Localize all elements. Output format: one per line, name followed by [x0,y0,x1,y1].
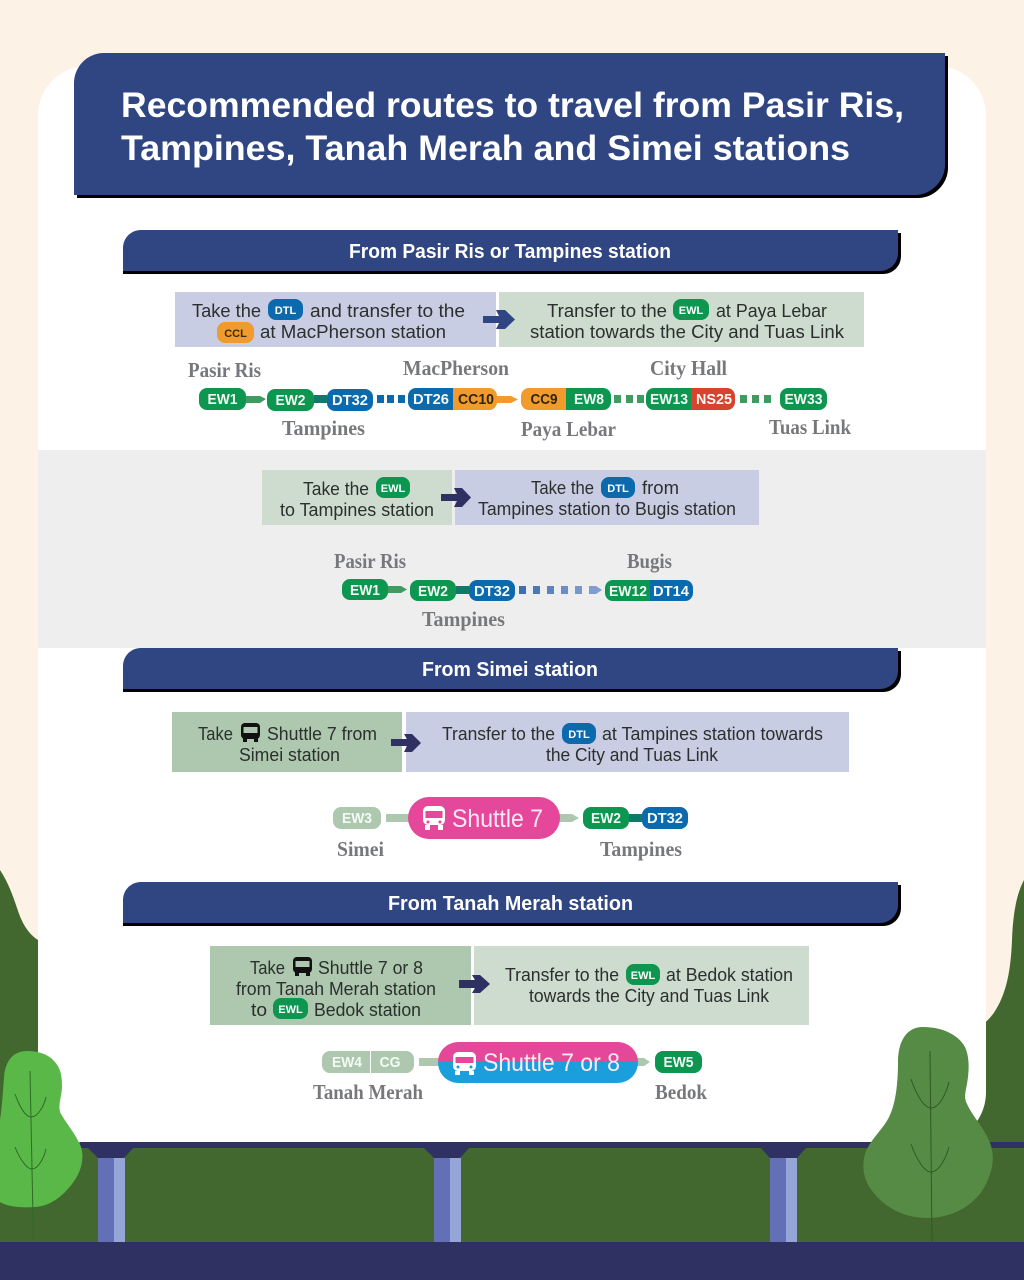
route diagram: Simei shuttle: EW2 [591,811,621,827]
route diagram: Pasir Ris to Tuas Link: EW2 [276,393,306,409]
panel: EWL at Bedok step: EWL [631,970,655,982]
panel: EWL to Tampines step [262,470,452,525]
section heading: Pasir Ris or Tampines: From Pasir Ris or Tampines station [349,241,671,263]
route diagram: Pasir Ris to Tuas Link: EW33 [784,392,822,408]
viaduct pillar 1 [87,1147,134,1242]
icon: bus [293,957,312,976]
panel: EWL to Tampines step: Take the [303,478,369,499]
route diagram: Pasir Ris to Tuas Link: DT32 [332,393,368,409]
route diagram: Pasir Ris to Bugis: DT32 [474,584,510,600]
title: Recommended routes to travel from Pasir Ris, [121,86,904,125]
section heading: Tanah Merah: From Tanah Merah station [388,893,633,915]
ground: green embankment [38,1147,1024,1243]
panel: DTL to Bugis step: Tampines station to Bugis station [478,498,736,519]
section heading: Simei: From Simei station [422,659,598,681]
panel: Shuttle 7 or 8 step: EWL [278,1004,303,1016]
icon: left tree [0,1051,82,1242]
shuttle 7 or 8 pill: Shuttle 7 or 8 [483,1049,620,1077]
section heading: Pasir Ris or Tampines [123,230,901,274]
panel: DTL then CCL step: at MacPherson station [260,321,446,342]
route diagram: Pasir Ris to Bugis: EW12 [609,584,647,600]
panel: DTL then CCL step: CCL [224,328,247,340]
panel: EWL transfer step: Transfer to the [547,300,667,321]
route diagram: Tanah Merah shuttle: EW4 [332,1055,362,1071]
route diagram: Pasir Ris to Tuas Link: Paya Lebar [521,417,616,441]
arrow: step 4 [459,975,490,993]
icon: bus [241,723,260,742]
route diagram: Pasir Ris to Tuas Link: CC10 [458,392,494,408]
icon: right tree [863,1027,993,1242]
route diagram: Pasir Ris to Bugis: Tampines [422,607,505,631]
panel: EWL transfer step: station towards the City and Tuas Link [530,321,845,342]
panel: DTL then CCL step: and transfer to the [310,300,465,321]
route diagram: Pasir Ris to Tuas Link: EW1 [208,392,238,408]
route diagram: Simei shuttle: Tampines [600,837,682,861]
station names: Pasir Ris [188,358,261,382]
panel: DTL to Bugis step: DTL [607,483,629,495]
route diagram: Tanah Merah shuttle [313,1042,707,1104]
route diagram: Tanah Merah shuttle: Bedok [655,1080,707,1104]
route diagram: Simei shuttle: DT32 [647,811,683,827]
panel: DTL to Bugis step [455,470,759,525]
arrow: step 2 [441,488,471,507]
panel: EWL at Bedok step: towards the City and Tuas Link [529,985,770,1006]
panel: DTL at Tampines step: at Tampines station towards [602,723,823,744]
route diagram: Pasir Ris to Bugis: DT14 [653,584,689,600]
panel: Shuttle 7 or 8 step [210,946,471,1025]
panel: DTL to Bugis step: Take the [531,477,594,498]
route diagram: Tanah Merah shuttle: CG [380,1055,400,1071]
panel: Shuttle 7 or 8 step: Take [250,957,285,978]
panel: DTL at Tampines step: DTL [568,729,590,741]
route diagram: Pasir Ris to Tuas Link: Tuas Link [769,415,851,439]
shuttle 7 or 8 pill [438,1042,638,1083]
main header: Tampines, Tanah Merah and Simei stations [121,129,850,168]
grey band behind second route [38,450,986,648]
route diagram: Tanah Merah shuttle: EW5 [664,1055,694,1071]
viaduct pillar 2 [423,1147,470,1242]
route diagram: Pasir Ris to Tuas Link [188,356,851,441]
route diagram: Pasir Ris to Tuas Link: CC9 [530,392,558,408]
panel: Shuttle 7 from Simei step [172,712,402,772]
section heading: Simei [123,648,901,692]
station names: Tanah Merah [313,1080,423,1104]
station names: Simei [337,837,384,861]
route diagram: Pasir Ris to Tuas Link: DT26 [413,392,449,408]
route diagram: Pasir Ris to Tuas Link: City Hall [650,356,727,380]
arrow: step 1 [483,310,515,329]
route diagram: Pasir Ris to Bugis: EW1 [350,583,380,599]
panel: DTL then CCL step [175,292,496,347]
panel: EWL at Bedok step: at Bedok station [666,964,793,985]
panel: EWL at Bedok step [474,946,809,1025]
viaduct rail [80,1142,1024,1148]
panel: Shuttle 7 or 8 step: to [251,999,267,1020]
panel: EWL transfer step: at Paya Lebar [716,300,827,321]
panel: EWL transfer step [499,292,864,347]
main header [74,53,948,198]
panel: Shuttle 7 or 8 step: Bedok station [314,999,421,1020]
station names: Pasir Ris [334,549,406,573]
panel: Shuttle 7 from Simei step: Shuttle 7 from [267,723,377,744]
panel: EWL at Bedok step: Transfer to the [505,964,619,985]
route diagram: Pasir Ris to Tuas Link: EW8 [574,392,604,408]
panel: EWL to Tampines step: EWL [381,483,405,495]
route diagram: Pasir Ris to Tuas Link: EW13 [650,392,688,408]
panel: DTL at Tampines step [406,712,849,772]
panel: Shuttle 7 from Simei step: Take [198,723,233,744]
route diagram: Pasir Ris to Bugis [334,549,693,631]
section heading: Tanah Merah [123,882,901,926]
route diagram: Pasir Ris to Tuas Link: NS25 [696,392,732,408]
white content panel [38,66,986,1143]
route diagram: Simei shuttle [333,797,688,861]
panel: Shuttle 7 or 8 step: Shuttle 7 or 8 [318,957,423,978]
panel: DTL at Tampines step: the City and Tuas Link [546,744,719,765]
panel: EWL to Tampines step: to Tampines station [280,499,434,520]
panel: Shuttle 7 or 8 step: from Tanah Merah station [236,978,436,999]
panel: EWL transfer step: EWL [679,305,703,317]
route diagram: Pasir Ris to Tuas Link: MacPherson [403,356,509,380]
background: left hill [0,870,80,1242]
route diagram: Pasir Ris to Bugis: EW2 [418,584,448,600]
road [0,1242,1024,1280]
route diagram: Pasir Ris to Bugis: Bugis [627,549,672,573]
panel: DTL then CCL step: Take the [192,300,261,321]
route diagram: Simei shuttle: EW3 [342,811,372,827]
shuttle 7 pill [408,797,560,839]
viaduct pillar 3 [760,1147,807,1242]
arrow: step 3 [391,734,421,752]
panel: DTL at Tampines step: Transfer to the [442,723,555,744]
panel: DTL then CCL step: DTL [275,305,296,317]
background: right hill [960,880,1024,1242]
panel: DTL to Bugis step: from [642,477,679,498]
shuttle 7 pill: Shuttle 7 [452,805,543,833]
route diagram: Pasir Ris to Tuas Link: Tampines [282,416,365,440]
panel: Shuttle 7 from Simei step: Simei station [239,744,340,765]
